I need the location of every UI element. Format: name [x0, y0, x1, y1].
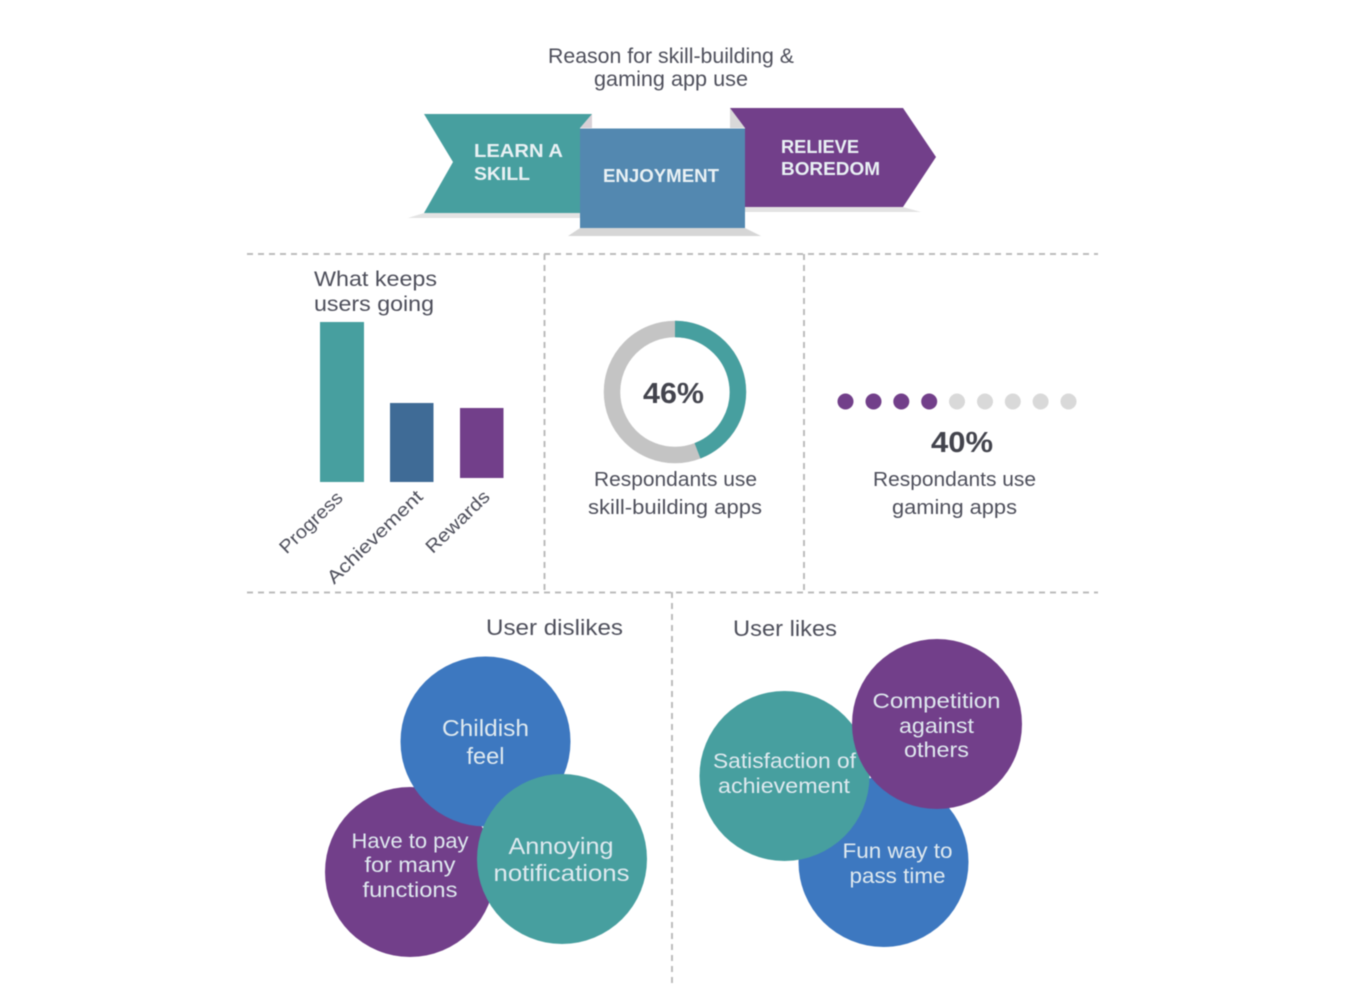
ribbon: learn a skill: LEARN A: [474, 141, 563, 161]
heading: user likes: User likes: [733, 616, 837, 641]
heading: what keeps users going: What keeps: [314, 268, 437, 291]
circle: competition against others: against: [899, 715, 974, 738]
heading: what keeps users going: [314, 268, 437, 316]
ribbon: relieve boredom: RELIEVE: [781, 137, 859, 157]
circle: competition against others: others: [904, 739, 969, 762]
donut chart: 46%: 46%: [643, 378, 704, 410]
bar chart: Achievement: [322, 486, 427, 588]
circle: childish feel: feel: [466, 743, 504, 769]
circle: annoying notifications: [477, 774, 647, 944]
circle: competition against others: [852, 639, 1022, 809]
circle: competition against others: Competition: [872, 690, 1000, 713]
ribbon: learn a skill: [424, 114, 592, 213]
caption: gaming apps: gaming apps: [892, 497, 1017, 519]
panel: skill-building apps stat: [588, 329, 762, 519]
heading: user dislikes: User dislikes: [486, 615, 623, 640]
circle: childish feel: [400, 656, 570, 826]
circle: fun way to pass time: Fun way to: [842, 840, 952, 863]
caption: skill-building apps: Respondants use: [594, 469, 757, 491]
circle: have to pay for many functions: Have to pay: [352, 830, 469, 853]
panel: gaming apps stat: [838, 394, 1076, 519]
caption: gaming apps: Respondants use: [873, 469, 1036, 491]
caption: skill-building apps: skill-building apps: [588, 497, 762, 519]
bar chart: [275, 322, 504, 588]
circle: have to pay for many functions: functions: [362, 879, 458, 902]
panel: user likes: [700, 616, 1022, 947]
ribbon: relieve boredom: [730, 108, 936, 207]
circle: childish feel: Childish: [442, 715, 529, 741]
title: Reason for skill-building &: [548, 45, 794, 68]
ribbon: relieve boredom: BOREDOM: [781, 159, 880, 179]
circle: fun way to pass time: [798, 777, 968, 947]
ribbon: enjoyment: ENJOYMENT: [603, 166, 719, 186]
heading: what keeps users going: users going: [314, 293, 434, 316]
circle: have to pay for many functions: for many: [364, 854, 456, 877]
title: [548, 45, 794, 91]
panel: what keeps users going: [275, 268, 504, 588]
circle: have to pay for many functions: [325, 787, 495, 957]
ribbon diagram: reasons for use: [408, 108, 936, 236]
ribbon: enjoyment: [580, 128, 745, 228]
panel: user dislikes: [325, 615, 647, 957]
circle: satisfaction of achievement: [700, 691, 870, 861]
caption: skill-building apps: [588, 469, 762, 519]
donut chart: 46%: [612, 329, 738, 455]
circle: satisfaction of achievement: Satisfaction of: [713, 750, 856, 773]
circle: annoying notifications: Annoying: [508, 833, 614, 859]
title: gaming app use: [594, 68, 748, 91]
circle: satisfaction of achievement: achievement: [718, 775, 850, 798]
stat: 40%: 40%: [931, 427, 993, 459]
caption: gaming apps: [873, 469, 1036, 519]
circle: annoying notifications: notifications: [494, 860, 630, 886]
ribbon: learn a skill: SKILL: [474, 164, 530, 184]
bar chart: Progress: [275, 487, 347, 557]
bar chart: Rewards: [421, 486, 494, 557]
dot scale: 4 of 9 filled: [838, 394, 1076, 410]
circle: fun way to pass time: pass time: [850, 865, 946, 888]
